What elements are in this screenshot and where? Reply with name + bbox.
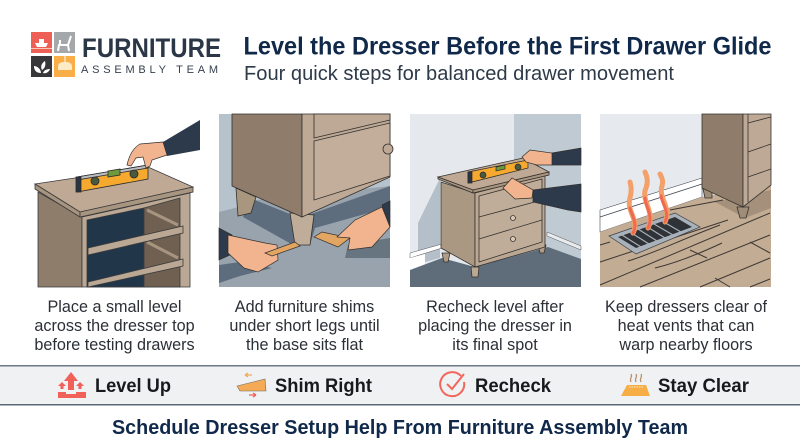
spirit level [468,160,528,183]
caption 1 [34,298,195,354]
floor [219,186,390,287]
caption 1: across the dresser top [34,317,195,335]
caption 3: its final spot [452,336,538,354]
panel: recheck level in corner [410,114,581,287]
dresser body [35,167,193,287]
caption 4: Keep dressers clear of [605,298,767,316]
icon: shim [237,373,266,397]
title: Level the Dresser Before the First Drawer Glide [244,32,772,60]
icon: recheck [440,372,464,396]
caption 3: Recheck level after [426,298,564,316]
panel: heat vent [600,114,771,287]
baseboard [600,178,702,232]
floor [410,247,581,287]
subtitle: Four quick steps for balanced drawer movement [244,63,674,85]
icon: leaf tile [31,56,52,77]
baseboards [410,244,442,258]
caption 2: the base sits flat [246,336,363,354]
caption 4: heat vents that can [618,317,754,335]
icon: level up [58,372,86,398]
panel: level on dresser [35,120,200,287]
panel: shims under legs [219,114,393,287]
badge band [0,365,800,406]
caption 1: Place a small level [47,298,182,316]
hands with shims [219,201,390,272]
wall shadow [418,178,440,264]
logo tagline: ASSEMBLY TEAM [81,64,218,76]
icon: lamp tile [54,56,75,77]
logo wordmark: FURNITURE [82,33,221,63]
caption 2 [229,298,380,354]
icon: stay clear [621,374,650,396]
caption 4: warp nearby floors [618,336,753,354]
hand and sleeve [127,120,200,168]
caption 2: Add furniture shims [235,298,374,316]
hands and sleeves [503,148,581,212]
label: level up: Level Up [95,376,171,397]
label: stay clear: Stay Clear [658,376,750,397]
logo [31,32,221,77]
dresser base [232,114,393,245]
icon: chair tile [54,32,75,53]
spirit level [76,165,148,192]
call to action: Schedule Dresser Setup Help From Furniture Assembly Team [112,417,688,439]
caption 3 [418,298,572,354]
caption 1: before testing drawers [34,336,195,354]
wood floor [600,185,771,287]
caption 2: under short legs until [229,317,380,335]
label: shim right: Shim Right [275,376,373,397]
heat waves [629,172,667,233]
dresser [438,158,549,277]
dresser [702,114,771,218]
label: recheck: Recheck [475,376,551,397]
caption 4 [605,298,767,354]
icon: sink tile [31,32,52,53]
heat vent grille [609,213,700,254]
caption 3: placing the dresser in [418,317,572,335]
